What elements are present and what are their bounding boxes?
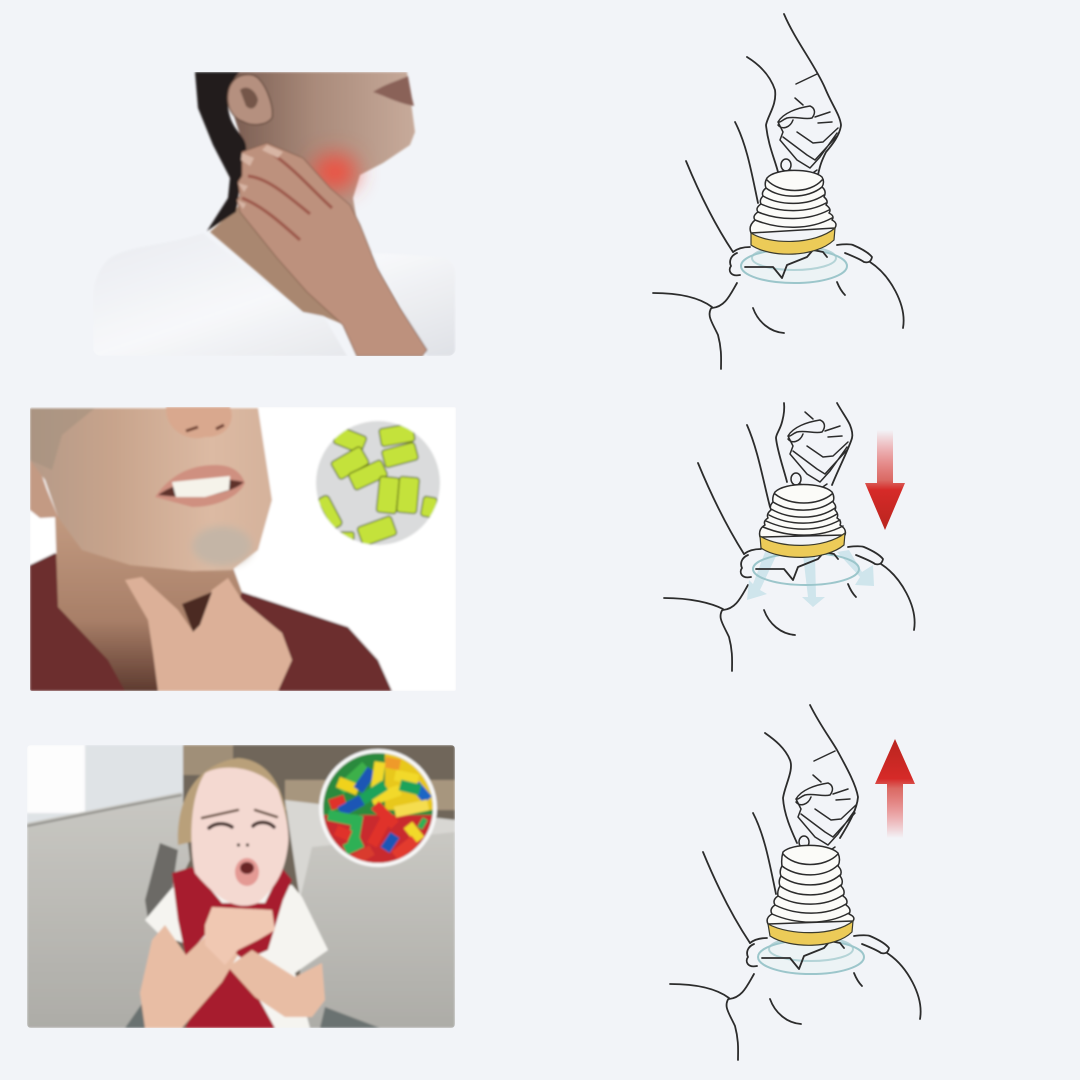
neck: [55, 515, 242, 691]
nostrils: [237, 844, 249, 846]
diagram 3: pulling up: [670, 705, 921, 1060]
face and neck: [230, 72, 415, 222]
left sofa seam: [27, 795, 182, 826]
eyes: [209, 822, 274, 828]
circle of gum: [316, 421, 440, 545]
right sofa back: [285, 800, 455, 900]
right sofa cushion: [300, 832, 455, 1028]
inner ear: [240, 88, 258, 108]
left arm: [140, 925, 238, 1028]
arm and body outlines: [776, 403, 852, 485]
blue ring: [741, 246, 847, 283]
gold band: [768, 921, 853, 945]
scarf around neck: [172, 867, 292, 960]
hands at chest: [205, 907, 275, 965]
clothing collar: [747, 935, 889, 969]
open mouth and teeth: [158, 479, 244, 497]
scarf lower tail: [185, 965, 275, 1028]
white backdrop: [30, 407, 456, 691]
arm and body outlines: [810, 705, 858, 838]
lips: [373, 76, 414, 106]
eyebrows: [202, 810, 277, 818]
photo: woman holding sore throat: [193, 72, 455, 356]
fist: [796, 751, 856, 854]
hand on neck: [237, 143, 427, 356]
gum pieces: [317, 423, 438, 547]
colourful pegs: [320, 750, 436, 866]
clothing collar: [741, 546, 883, 580]
hand at throat: [125, 577, 292, 691]
fist: [778, 74, 838, 177]
gold band: [760, 533, 845, 557]
stubble: [192, 526, 252, 566]
fingernails: [237, 145, 283, 209]
dark pillow: [145, 843, 178, 920]
gold band: [751, 228, 835, 254]
gap between thumb and fingers: [182, 592, 212, 632]
bright window: [27, 745, 183, 830]
girl face: [191, 768, 288, 906]
arrow: red up: [875, 739, 915, 838]
ear: [30, 455, 58, 518]
compressed bellows: [760, 484, 845, 537]
extended bellows: [767, 845, 854, 924]
diagram 1: device at rest on chest: [653, 14, 904, 369]
blue arrows: [747, 550, 874, 607]
chest skin: [210, 205, 350, 325]
white t-shirt: [145, 885, 328, 1028]
bellows stack: [750, 170, 836, 233]
hair: [195, 72, 246, 231]
warm lamp blur: [183, 745, 233, 775]
girl hair: [178, 758, 288, 850]
blue ring: [753, 553, 859, 585]
nose: [166, 407, 232, 438]
diagram 2: pressing down with suction arrows: [664, 403, 915, 671]
open mouth: [235, 858, 259, 886]
maroon shirt: [30, 553, 392, 691]
right forearm: [228, 950, 325, 1017]
arrow: red down: [865, 430, 905, 530]
room background: [175, 745, 455, 1028]
sofa shadow near seat: [125, 1004, 379, 1028]
circle of coloured pegs: [319, 749, 437, 867]
white t-shirt: [286, 253, 455, 356]
fist: [788, 412, 848, 491]
throat redness: [313, 154, 357, 190]
photo: child coughing on sofa: [27, 745, 455, 1028]
finger gaps: [242, 152, 332, 240]
lips: [155, 465, 245, 507]
arm and body outlines: [784, 14, 841, 175]
left sofa: [27, 792, 190, 1028]
hairline: [30, 408, 95, 470]
face: [30, 408, 272, 571]
blue ring: [758, 937, 864, 974]
clothing collar: [730, 244, 872, 278]
ear: [228, 74, 272, 125]
photo: man choking on chewing gum: [30, 407, 456, 691]
